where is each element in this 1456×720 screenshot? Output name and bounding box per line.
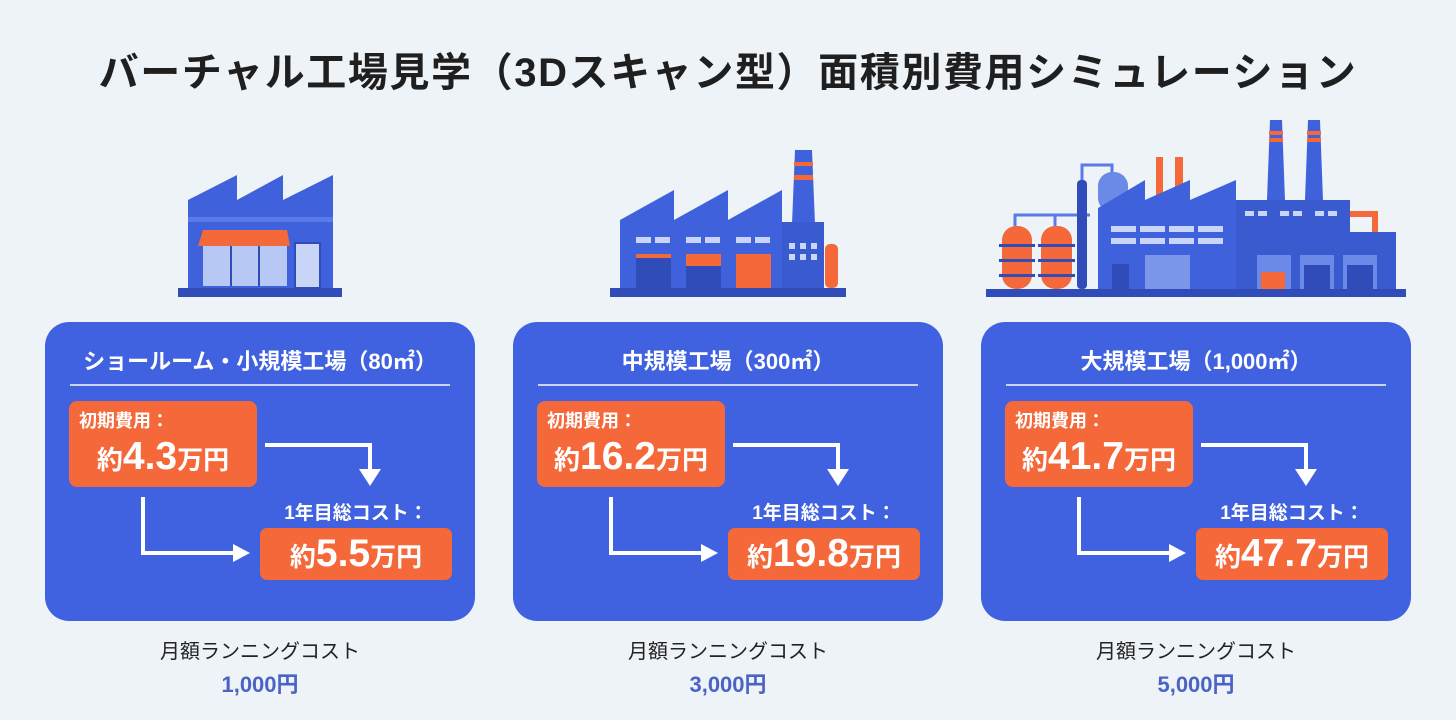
footer: small: 月額ランニングコスト [160,641,360,663]
first year label: 1年目総コスト： [284,503,428,524]
initial cost box: 初期費用： [79,411,169,431]
initial cost box [1005,401,1193,487]
initial cost box: 初期費用： [1015,411,1105,431]
initial cost box [69,401,257,487]
panel heading: 中規模工場（300㎡） [622,349,834,374]
footer: medium: 月額ランニングコスト [628,641,828,663]
initial cost box: 約16.2万円 [554,435,708,478]
initial cost box [537,401,725,487]
text: 3,000円 [689,672,767,697]
arrows [1077,443,1317,562]
first year box: 約19.8万円 [747,532,901,575]
first year box: 約5.5万円 [290,532,422,575]
icon: small showroom factory [178,175,342,297]
arrows [141,443,381,562]
first year label: 1年目総コスト： [752,503,896,524]
text: 5,000円 [1157,672,1235,697]
initial cost box: 約4.3万円 [97,435,229,478]
icons [178,120,1406,297]
panel heading: 大規模工場（1,000㎡） [1080,349,1312,374]
icon: large factory [986,120,1406,297]
initial cost box: 初期費用： [547,411,637,431]
arrows [609,443,849,562]
panel: large [981,322,1411,621]
initial cost box: 約41.7万円 [1022,435,1176,478]
footer: large: 月額ランニングコスト [1096,641,1296,663]
panel: medium [513,322,943,621]
first year box [1196,528,1388,580]
icon: medium factory [610,150,846,297]
text: 1,000円 [221,672,299,697]
title: バーチャル工場見学（3Dスキャン型）面積別費用シミュレーション [99,51,1357,95]
panel: small [45,322,475,621]
first year box: 約47.7万円 [1215,532,1369,575]
panel heading: ショールーム・小規模工場（80㎡） [83,349,437,374]
first year box [260,528,452,580]
first year box [728,528,920,580]
first year label: 1年目総コスト： [1220,503,1364,524]
